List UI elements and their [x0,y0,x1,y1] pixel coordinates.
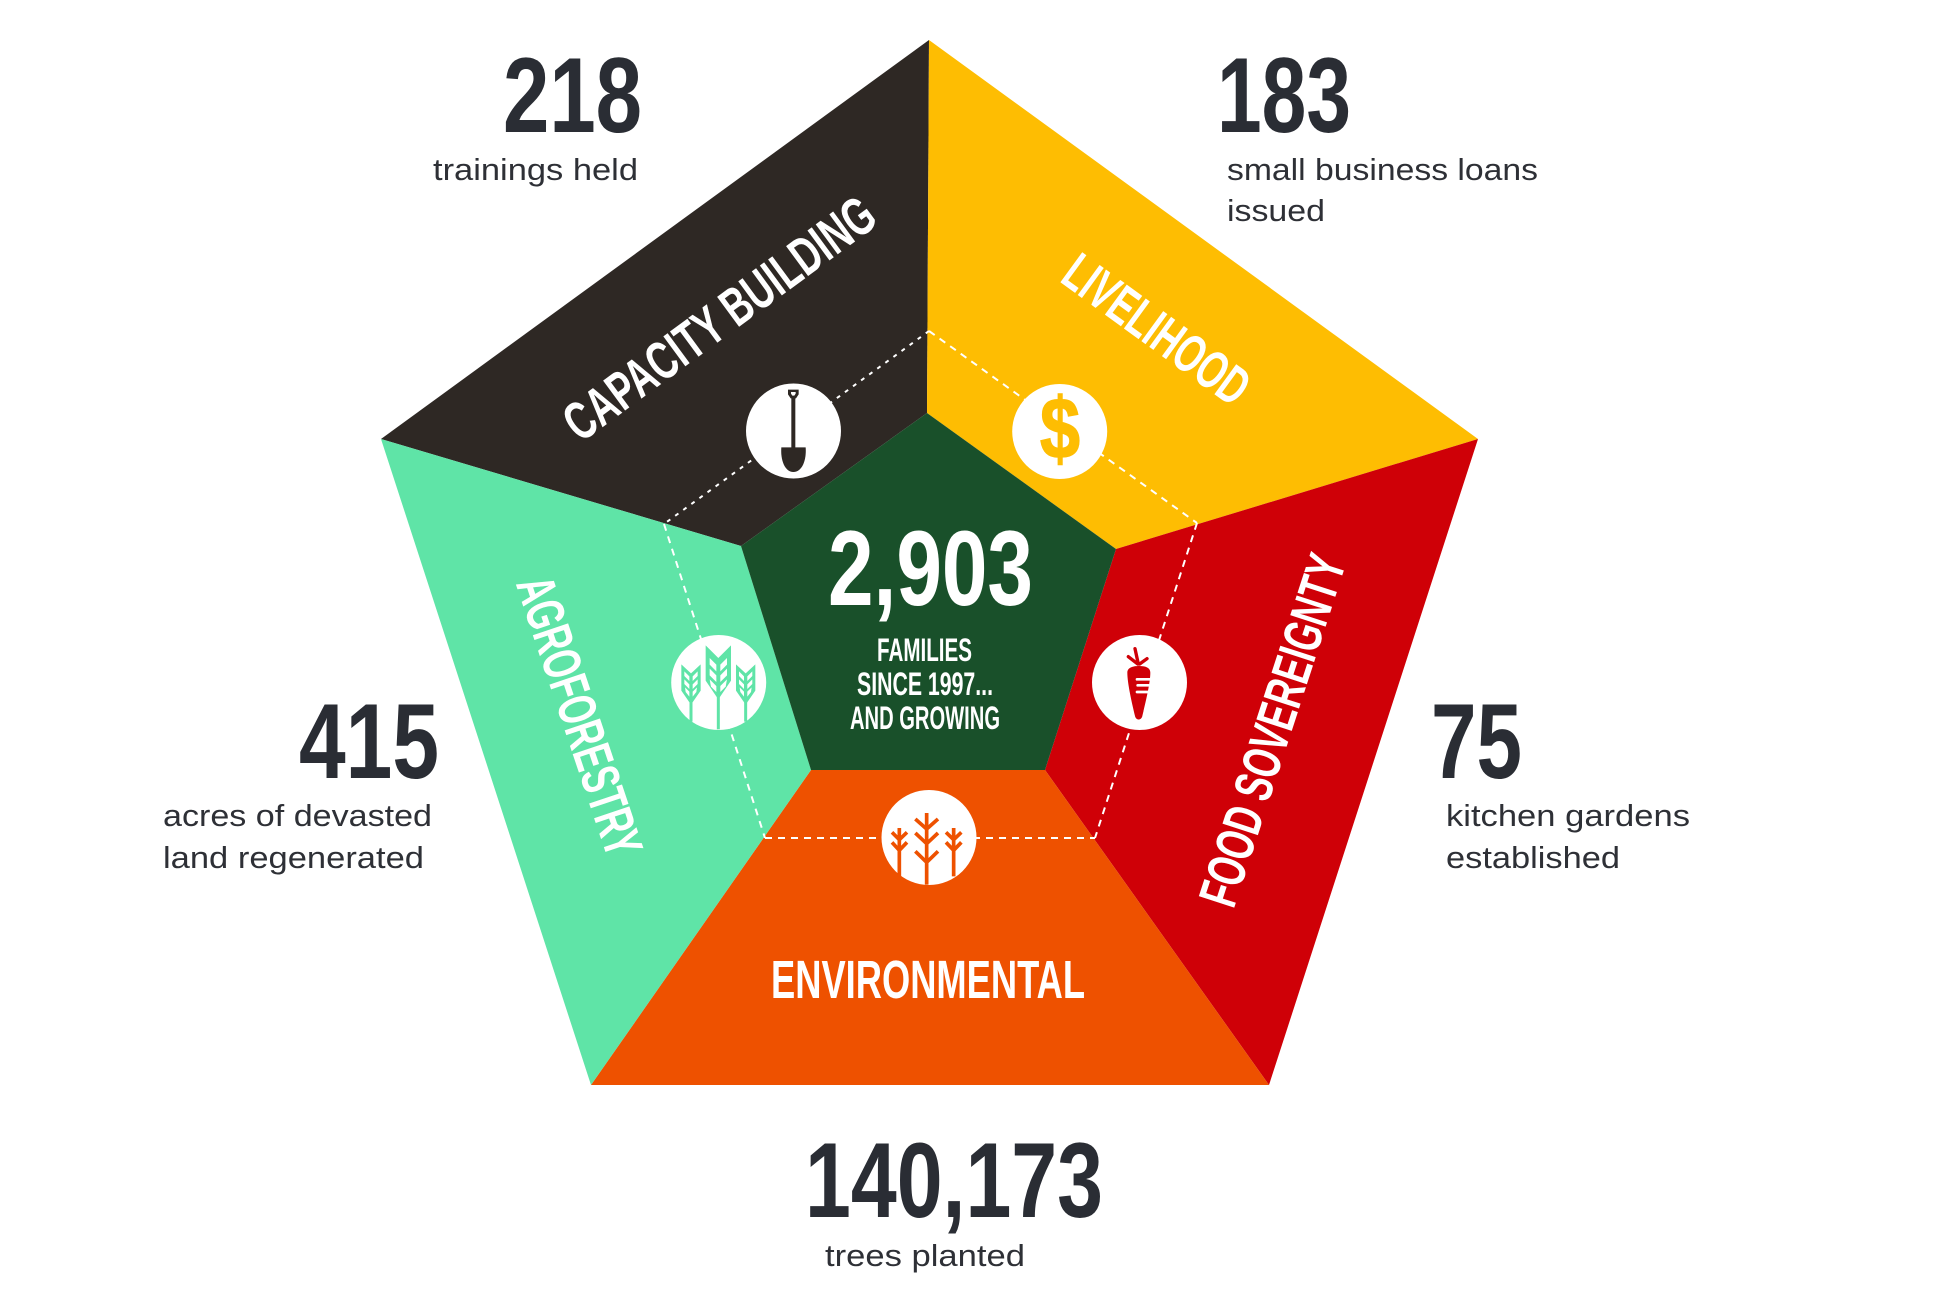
stat: acres regenerated [163,681,439,875]
dashed connector lines [664,331,1197,838]
center stat: 2,903 families [828,508,1033,736]
stat: kitchen gardens: established [1446,840,1620,875]
stat: kitchen gardens: kitchen gardens [1446,798,1690,833]
stat: acres regenerated: land regenerated [163,840,424,875]
segment: livelihood [927,40,1478,549]
icon: wheat [671,635,766,730]
stat: trees planted: trees planted [825,1238,1025,1273]
stat: small business loans: small business loans [1227,152,1538,187]
segment: capacity building [381,40,929,546]
center stat: 2,903 families: SINCE 1997... [857,666,993,702]
icon: shovel [746,384,841,478]
center stat: 2,903 families: AND GROWING [850,700,1000,736]
stat: trainings held: trainings held [433,152,638,187]
center pentagon [741,413,1116,770]
stat: acres regenerated: acres of devasted [163,798,432,833]
stat: trees planted: 140,173 [805,1120,1103,1240]
icon: trees [882,790,976,885]
stat: trainings held [433,35,642,187]
pentagon diagram [381,40,1478,1085]
segment label: agroforestry: AGROFORESTRY [504,568,654,864]
segment: agroforestry [381,439,811,1085]
stat: small business loans [1217,35,1538,228]
stat: trainings held: 218 [503,35,642,155]
center stat: 2,903 families: 2,903 [828,508,1033,628]
center stat: 2,903 families: FAMILIES [877,632,972,668]
icon: carrot [1092,635,1187,730]
segment: food sovereignty [1045,439,1478,1085]
stat: kitchen gardens [1431,681,1690,875]
segment label: capacity building: CAPACITY BUILDING [552,185,887,453]
stat: acres regenerated: 415 [299,681,439,801]
stat: small business loans: issued [1227,193,1325,228]
stat: kitchen gardens: 75 [1431,681,1522,801]
segment: environmental [591,770,1269,1085]
segment label: environmental: ENVIRONMENTAL [771,950,1085,1010]
stat: small business loans: 183 [1217,35,1351,155]
segment label: food sovereignty: FOOD SOVEREIGNTY [1188,547,1358,914]
icon: dollar sign: $ [1040,381,1080,477]
icon: dollar sign [1012,381,1107,479]
stat: trees planted [805,1120,1103,1273]
segment label: livelihood: LIVELIHOOD [1051,242,1261,418]
